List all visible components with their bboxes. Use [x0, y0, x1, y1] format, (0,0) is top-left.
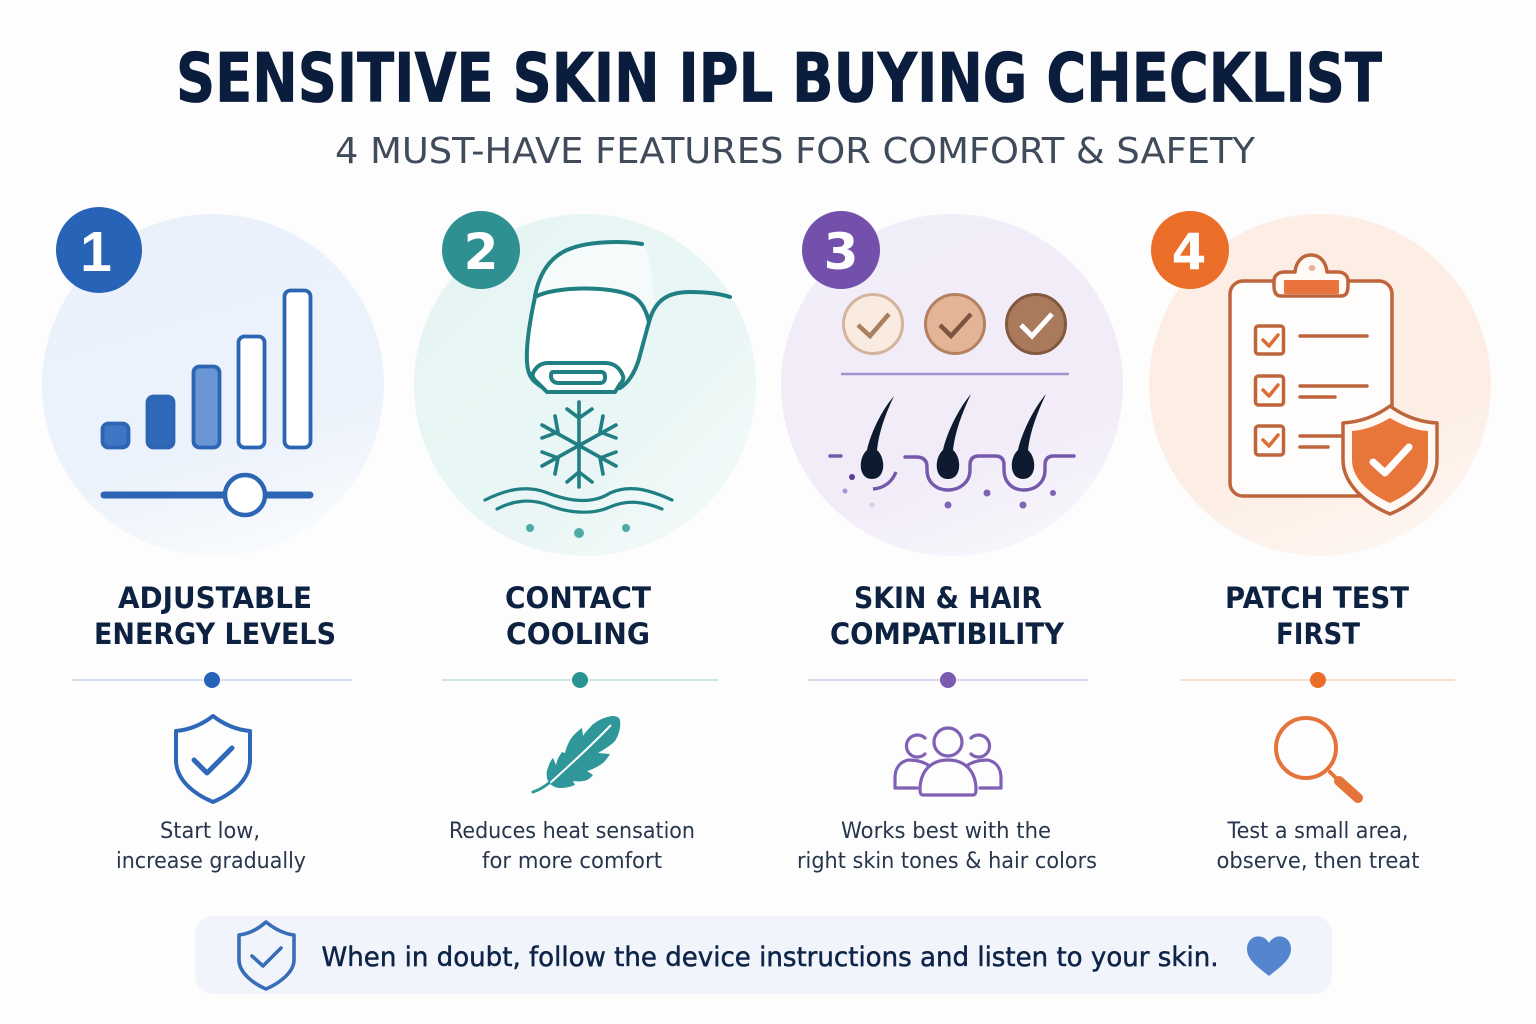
description: observe, then treat: [1216, 849, 1420, 874]
divider: [442, 672, 718, 688]
heading: adjustable energy levels: ADJUSTABLE: [118, 581, 312, 615]
number badge 3: [802, 211, 880, 289]
number badge 1: 1: [80, 220, 112, 284]
callout: [195, 916, 1332, 994]
description: Start low,: [160, 819, 260, 844]
icon: heart: [1247, 936, 1291, 976]
panel: adjustable energy levels: [42, 207, 384, 874]
number badge 4: [1151, 211, 1229, 289]
icon: people group: [895, 728, 1001, 795]
description: for more comfort: [482, 849, 662, 874]
heading: contact cooling: COOLING: [506, 617, 650, 651]
panel: contact cooling: [414, 211, 756, 874]
icon: snowflake: [542, 402, 616, 487]
heading: skin and hair compatibility: SKIN & HAIR: [854, 581, 1042, 615]
icon: hair follicles: [830, 394, 1074, 508]
bar chart: energy levels: [102, 290, 310, 448]
heading: patch test first: PATCH TEST: [1225, 581, 1409, 615]
number badge 2: [442, 211, 520, 289]
feature circle 3: [781, 214, 1123, 556]
heading: patch test first: FIRST: [1276, 617, 1360, 651]
heading: contact cooling: CONTACT: [505, 581, 651, 615]
divider: [808, 672, 1088, 688]
divider: [1180, 672, 1455, 688]
description: increase gradually: [116, 849, 306, 874]
icon: clipboard checklist: [1230, 255, 1392, 496]
icon: skin tone swatches: [844, 294, 1066, 354]
heading: skin and hair compatibility: COMPATIBILITY: [830, 617, 1065, 651]
description: Test a small area,: [1227, 819, 1408, 844]
feature circle 1: [42, 214, 384, 556]
icon: callout shield: [239, 922, 294, 989]
icon: dots: [526, 524, 630, 538]
number badge 2: 2: [464, 223, 498, 281]
number badge 1: [56, 207, 142, 293]
description: Works best with the: [841, 819, 1051, 844]
icon: orange shield: [1343, 406, 1437, 514]
callout text: When in doubt, follow the device instructions and listen to your skin.: [322, 942, 1218, 973]
feature circle 2: [414, 214, 756, 556]
panel: skin and hair compatibility: [781, 211, 1123, 874]
icon: magnifying glass: [1276, 718, 1358, 798]
slider: [104, 475, 310, 515]
number badge 4: 4: [1172, 223, 1206, 281]
number badge 3: 3: [824, 223, 858, 281]
icon: skin waves: [485, 489, 672, 512]
description: right skin tones & hair colors: [797, 849, 1097, 874]
description: Reduces heat sensation: [449, 819, 695, 844]
divider: [72, 672, 352, 688]
feature circle 4: [1149, 214, 1491, 556]
subtitle: 4 MUST-HAVE FEATURES FOR COMFORT & SAFETY: [335, 131, 1256, 172]
icon: IPL device head: [527, 242, 730, 392]
panel: patch test first: [1149, 211, 1491, 874]
heading: adjustable energy levels: ENERGY LEVELS: [94, 617, 336, 651]
icon: feather: [533, 716, 620, 792]
icon: shield check: [176, 716, 250, 802]
